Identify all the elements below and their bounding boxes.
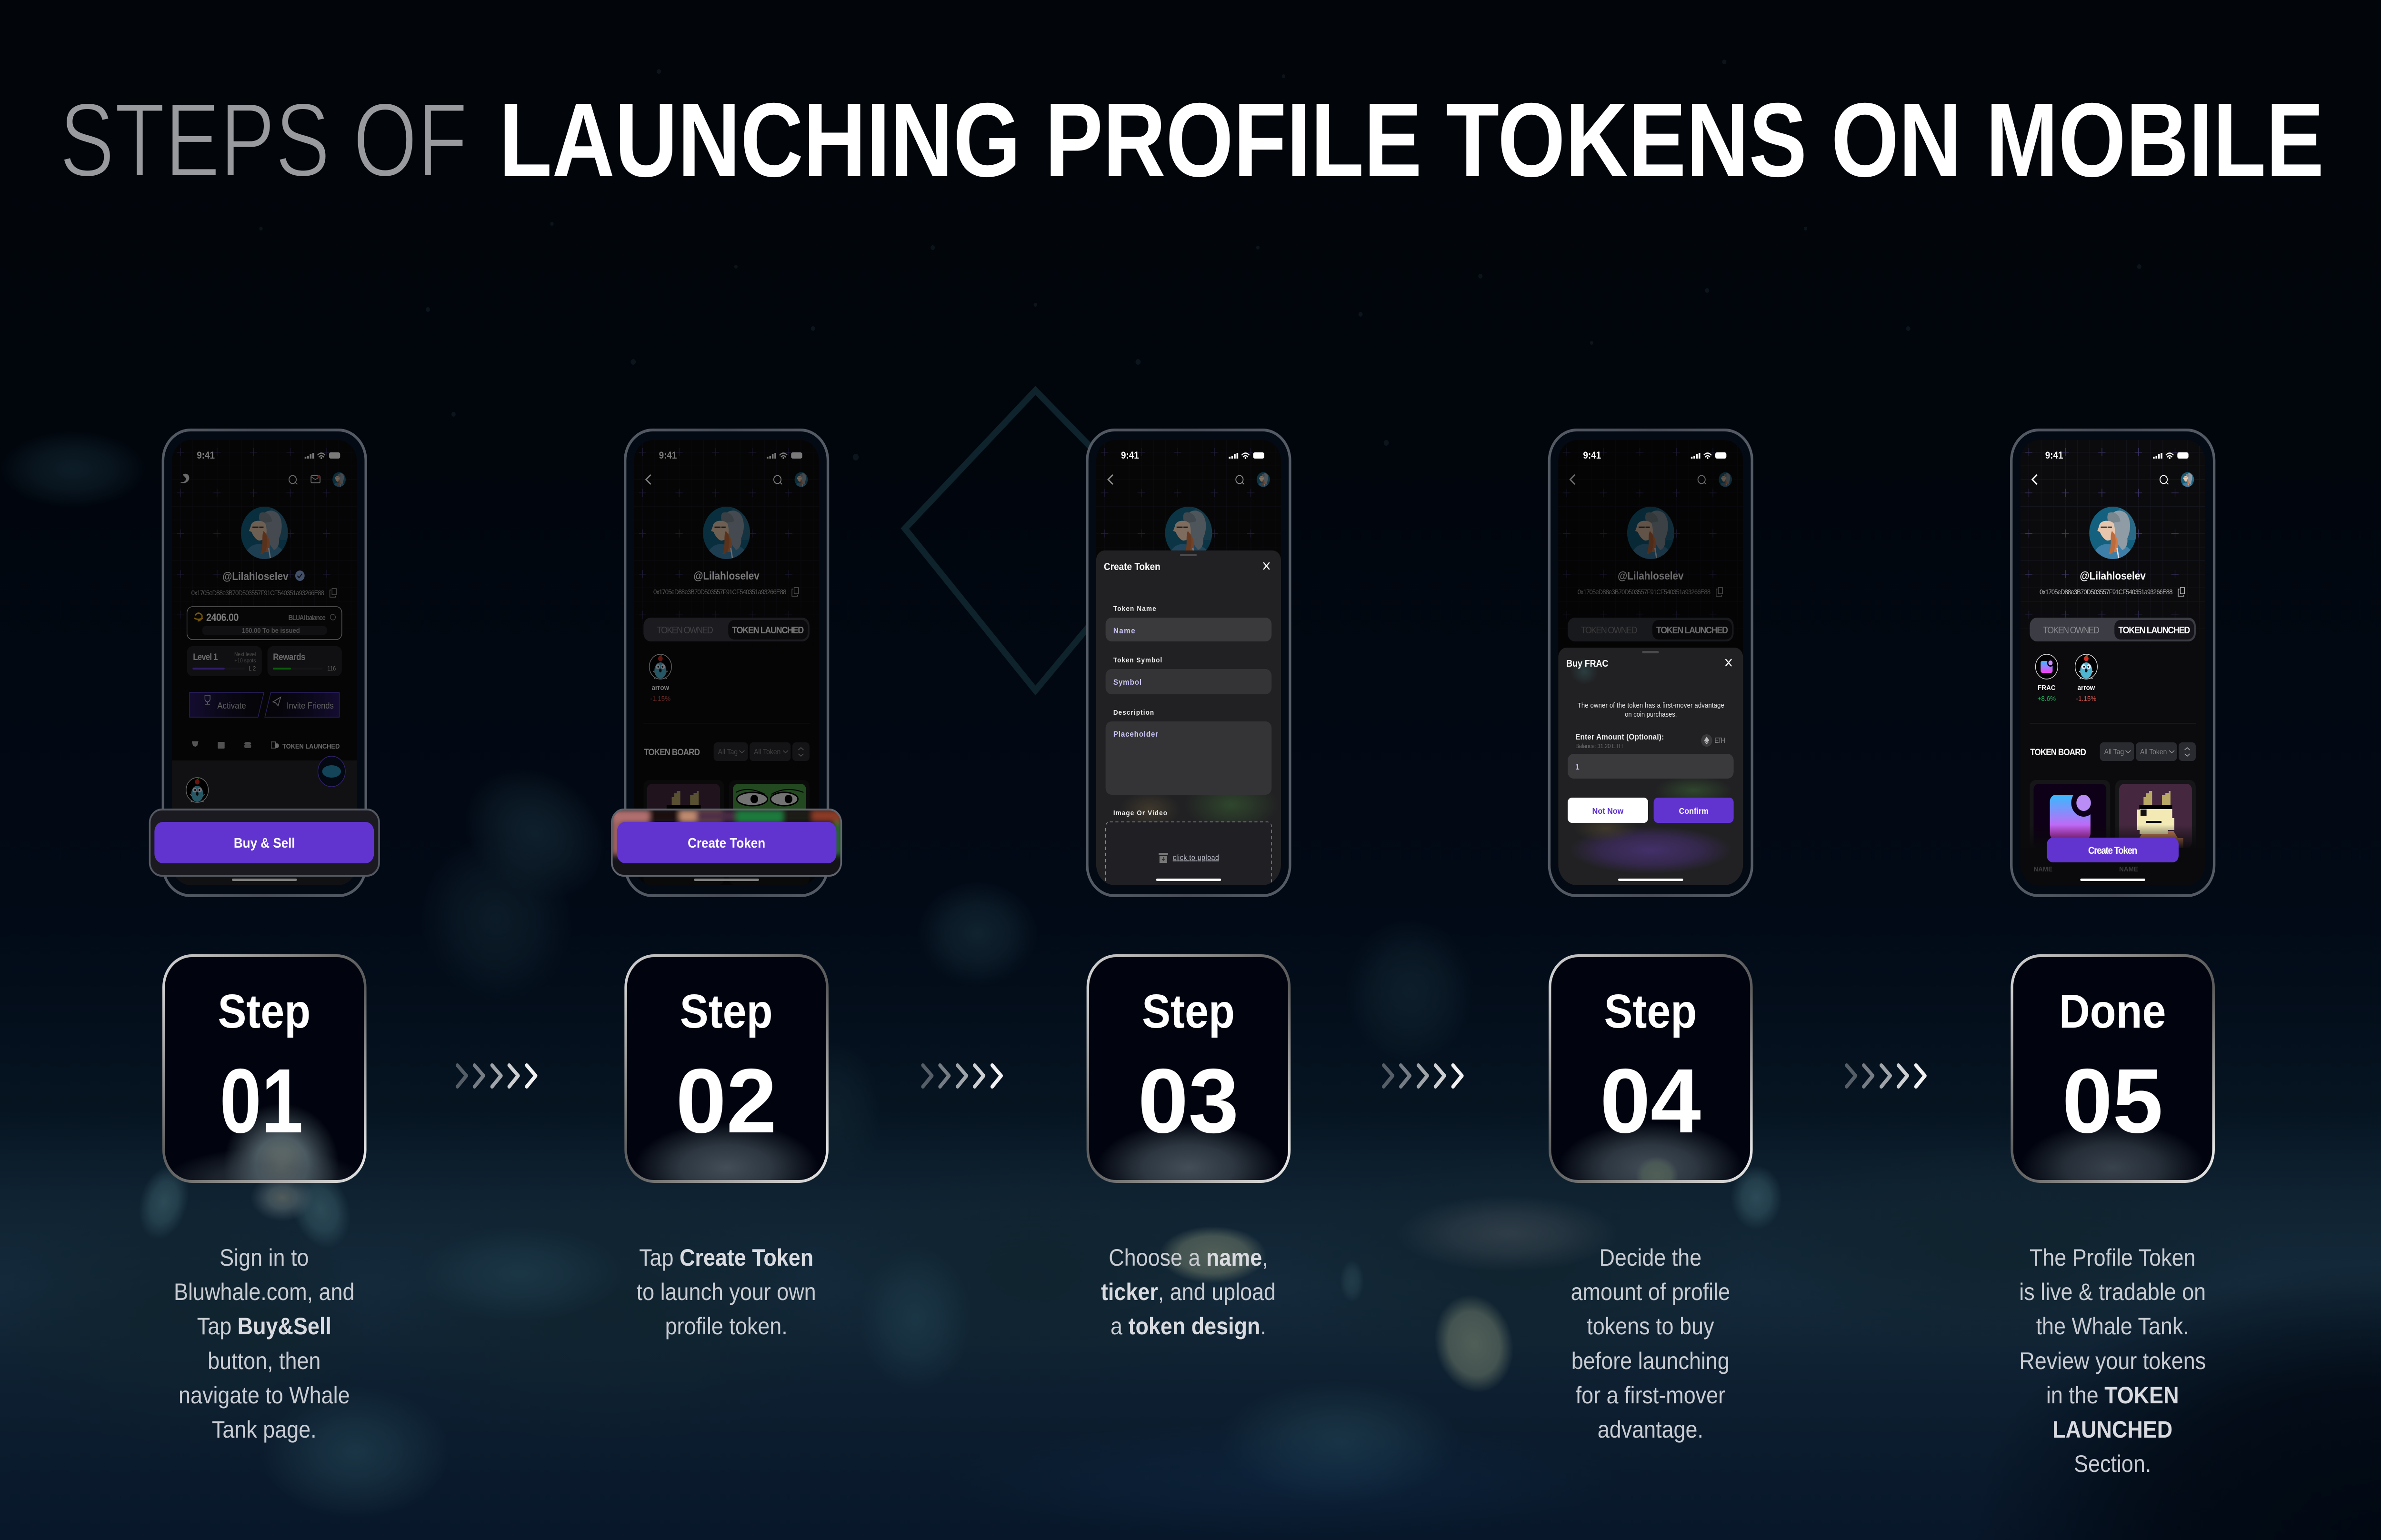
phone 5: done, token launched <box>2011 430 2214 896</box>
step 01 description: Bluwhale.com, and <box>174 1279 355 1306</box>
bottom action bar <box>611 809 842 877</box>
screen content <box>2021 440 2205 885</box>
create token sheet: Token Name <box>1113 605 1156 613</box>
token board header: All Tag <box>2104 748 2124 756</box>
label: Done <box>2059 985 2166 1038</box>
arrow 4 <box>1847 1065 1925 1087</box>
done 05 description: LAUNCHED <box>2052 1417 2172 1443</box>
number: 05 <box>2062 1050 2163 1152</box>
step 04 description: Decide the <box>1599 1245 1701 1271</box>
step 04 description <box>1571 1245 1730 1443</box>
screen content: 150.00 To be issued <box>242 627 300 634</box>
token cards: NAME <box>2033 865 2052 873</box>
token tabs <box>2030 618 2196 641</box>
label: Step <box>680 985 772 1038</box>
create token sheet: Image Or Video <box>1113 809 1167 817</box>
done 05 description: Review your tokens <box>2019 1348 2206 1375</box>
screen content: -1.15% <box>650 695 670 703</box>
create token sheet: Token Symbol <box>1113 656 1162 664</box>
screen content: Invite Friends <box>287 700 334 710</box>
create token sheet: Symbol <box>1113 678 1141 687</box>
buy FRAC sheet: Buy FRAC <box>1566 659 1609 669</box>
buy FRAC sheet: ETH <box>1714 737 1726 745</box>
screen content: TOKEN LAUNCHED <box>732 625 804 636</box>
buy FRAC sheet: The owner of the token has a first-mover advantage <box>1578 701 1724 709</box>
screen content <box>634 440 819 885</box>
token board header <box>2030 742 2196 761</box>
buy FRAC sheet: Enter Amount (Optional): <box>1575 732 1664 741</box>
done 05 description: the Whale Tank. <box>2036 1313 2189 1340</box>
profile avatar <box>2089 507 2136 559</box>
step 01 description: navigate to Whale <box>179 1382 350 1409</box>
create token sheet: Placeholder <box>1113 730 1159 739</box>
launched tokens: arrow <box>2078 684 2095 692</box>
step 01 description: Tank page. <box>212 1417 317 1443</box>
screen content: arrow <box>651 684 670 692</box>
screen content: @Lilahloselev <box>222 570 289 582</box>
screen content: @Lilahloselev <box>693 570 760 582</box>
screen content: TOKEN BOARD <box>644 747 700 757</box>
buy FRAC sheet: 1 <box>1575 762 1580 771</box>
step 01 description: Tap Buy&Sell <box>197 1313 331 1340</box>
arrow 2 <box>923 1065 1001 1087</box>
create token sheet: Name <box>1113 626 1135 635</box>
screen content: @Lilahloselev <box>1618 570 1684 582</box>
number: 02 <box>676 1050 777 1152</box>
step 02 description: to launch your own <box>637 1279 816 1306</box>
title bold part: LAUNCHING PROFILE TOKENS ON MOBILE <box>499 80 2324 199</box>
screen content: Level 1 <box>193 652 218 662</box>
step 03 description: a token design. <box>1110 1313 1266 1340</box>
buy FRAC sheet: on coin purchases. <box>1625 710 1677 718</box>
token tabs: TOKEN LAUNCHED <box>2118 625 2190 636</box>
done 05 description: is live & tradable on <box>2019 1279 2206 1306</box>
step 01 description <box>174 1245 355 1443</box>
create token sheet: Description <box>1113 709 1154 717</box>
token tabs: TOKEN OWNED <box>2043 625 2100 636</box>
screen content: @Lilahloselev <box>2080 570 2146 582</box>
step 04 description: before launching <box>1571 1348 1730 1375</box>
step 02 card <box>626 956 827 1213</box>
step 02 description: Tap Create Token <box>639 1245 813 1271</box>
phone 3: create token form <box>1087 430 1290 898</box>
screen content: 9:41 <box>2045 450 2063 461</box>
screen content: 9:41 <box>197 450 215 461</box>
screen content: 0x1705eD88e3B70D503557F91CF540351a93266E88 <box>1578 588 1711 596</box>
token board header: All Token <box>2140 748 2167 756</box>
number: 01 <box>220 1050 303 1152</box>
Buy & Sell button <box>154 822 374 863</box>
home indicator <box>694 879 759 881</box>
home indicator <box>232 879 297 881</box>
step 03 description: Choose a name, <box>1109 1245 1268 1271</box>
bottom action bar: Buy & Sell <box>234 835 295 850</box>
create token sheet <box>1096 550 1281 898</box>
screen content: 9:41 <box>1583 450 1601 461</box>
screen content: +10 spots <box>234 658 256 664</box>
done 05 card <box>2012 956 2213 1213</box>
token board header: TOKEN BOARD <box>2030 747 2086 757</box>
phone 1: profile screen with Buy & Sell button <box>150 430 379 896</box>
screen content: 0x1705eD88e3B70D503557F91CF540351a93266E88 <box>2040 588 2173 596</box>
arrow 1 <box>457 1065 536 1087</box>
step 02 description: profile token. <box>665 1313 788 1340</box>
screen content <box>1096 440 1281 898</box>
screen content: TOKEN OWNED <box>657 625 713 636</box>
screen content: 0x1705eD88e3B70D503557F91CF540351a93266E88 <box>191 589 324 597</box>
done 05 description: Section. <box>2074 1451 2151 1478</box>
step 04 description: tokens to buy <box>1587 1313 1714 1340</box>
bottom action bar <box>150 810 379 876</box>
arrow 3 <box>1384 1065 1462 1087</box>
screen content: 9:41 <box>1121 450 1139 461</box>
step 02 description <box>637 1245 816 1340</box>
number: 03 <box>1138 1050 1239 1152</box>
title <box>60 80 2324 199</box>
screen content: TOKEN OWNED <box>1581 625 1637 636</box>
number: 04 <box>1600 1050 1701 1152</box>
home indicator <box>2080 879 2145 881</box>
step 04 description: for a first-mover <box>1576 1382 1725 1409</box>
token cards <box>2021 780 2205 885</box>
screen content: TOKEN LAUNCHED <box>282 742 340 750</box>
Create Token button <box>617 822 837 863</box>
phone frame <box>625 430 828 896</box>
launched tokens <box>2035 654 2097 703</box>
screen content: 2406.00 <box>206 612 239 623</box>
step 01 description: button, then <box>208 1348 320 1375</box>
step 01 description: Sign in to <box>220 1245 309 1271</box>
step 01 card <box>164 956 365 1227</box>
step 04 description: advantage. <box>1598 1417 1703 1443</box>
step 04 card <box>1550 956 1751 1213</box>
label: Step <box>1604 985 1697 1038</box>
Confirm button <box>1654 798 1734 823</box>
label: Step <box>1142 985 1235 1038</box>
step 03 description <box>1101 1245 1276 1340</box>
title light part: STEPS OF <box>60 81 468 199</box>
done 05 description <box>2019 1245 2206 1478</box>
screen content <box>1558 440 1743 885</box>
buy FRAC sheet: Balance: 31.20 ETH <box>1575 742 1623 750</box>
token cards: NAME <box>2119 865 2138 873</box>
buy FRAC sheet: Not Now <box>1592 806 1624 816</box>
label: Step <box>218 985 310 1038</box>
phone frame <box>1549 430 1752 896</box>
done 05 description: in the TOKEN <box>2046 1382 2179 1409</box>
home indicator <box>1618 879 1683 881</box>
home indicator <box>1156 879 1221 881</box>
screen content: Next level <box>234 652 256 658</box>
create token sheet: Create Token <box>1104 561 1160 572</box>
screen content: Rewards <box>273 652 306 662</box>
phone frame <box>163 430 366 896</box>
screen content: 0x1705eD88e3B70D503557F91CF540351a93266E88 <box>653 588 787 596</box>
screen content: 116 <box>327 665 336 672</box>
Create Token button: Create Token <box>2088 845 2137 856</box>
screen content: L 2 <box>249 665 256 672</box>
screen content: TOKEN LAUNCHED <box>1656 625 1728 636</box>
screen content: BLUAI balance <box>289 614 326 621</box>
launched tokens: +8.6% <box>2038 695 2056 703</box>
screen content: Activate <box>217 700 246 710</box>
step 03 card <box>1088 956 1290 1213</box>
buy FRAC sheet <box>1558 648 1743 885</box>
Create Token button <box>2047 838 2179 862</box>
phone frame <box>2011 430 2214 896</box>
screen content <box>172 440 357 885</box>
bottom action bar: Create Token <box>688 835 765 850</box>
phone 2: token board with Create Token button <box>611 430 842 896</box>
launched tokens: -1.15% <box>2076 695 2097 703</box>
Not Now button <box>1568 798 1648 823</box>
screen content: All Tag <box>718 748 738 756</box>
launched tokens: FRAC <box>2038 684 2056 692</box>
create token sheet: click to upload <box>1173 854 1219 862</box>
step 04 description: amount of profile <box>1571 1279 1730 1306</box>
screen content: All Token <box>754 748 780 756</box>
buy FRAC sheet: Confirm <box>1679 806 1709 816</box>
step 03 description: ticker, and upload <box>1101 1279 1276 1306</box>
phone frame <box>1087 430 1290 896</box>
done 05 description: The Profile Token <box>2030 1245 2196 1271</box>
screen content: 9:41 <box>659 450 677 461</box>
phone 4: buy token sheet <box>1549 430 1752 896</box>
